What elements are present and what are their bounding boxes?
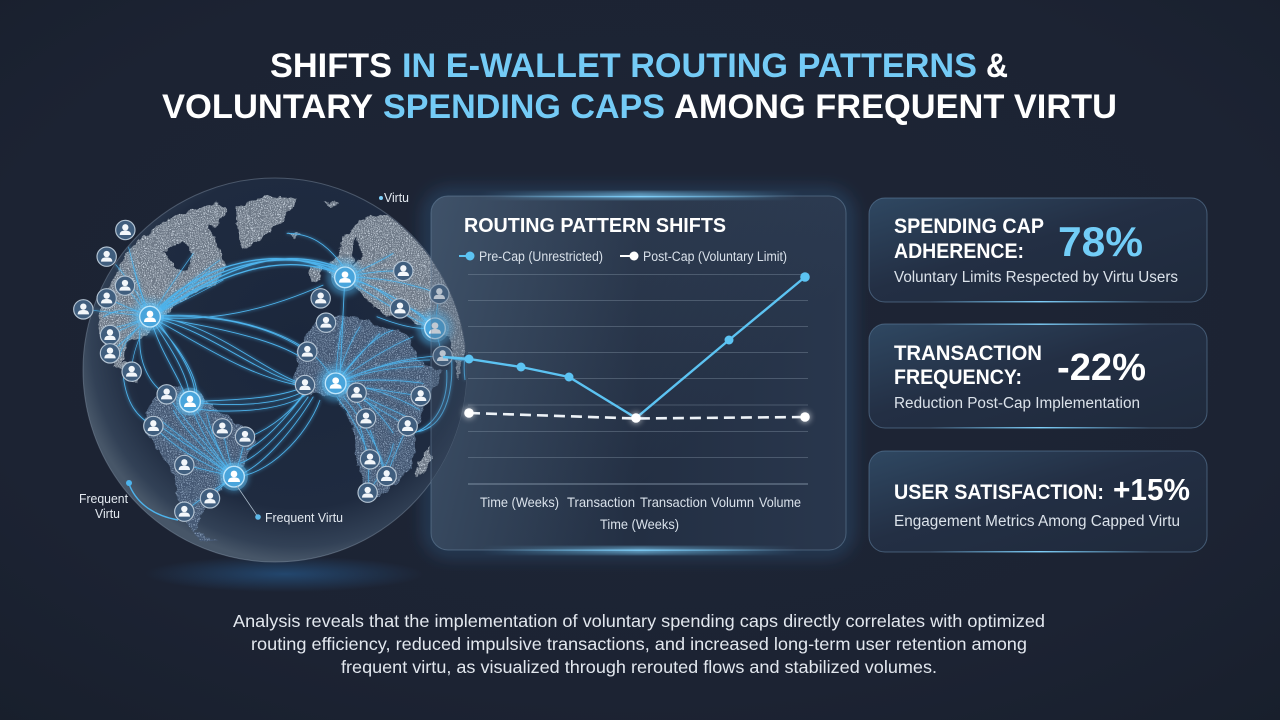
card: transaction frequency: FREQUENCY: — [894, 366, 1022, 389]
label: frequent virtu bottom — [237, 486, 343, 525]
card: spending cap adherence: 78% — [1058, 218, 1143, 265]
title: SPENDING CAPS — [383, 88, 665, 126]
globe labels — [79, 191, 409, 525]
axis labels: Time (Weeks) — [480, 494, 559, 510]
panel glow edges — [480, 193, 800, 553]
user nodes — [74, 220, 452, 521]
route lines — [83, 233, 480, 512]
card: spending cap adherence: Voluntary Limits Respected by Virtu Users — [894, 269, 1178, 286]
label: top virtu: Virtu — [384, 191, 409, 205]
line: pre-cap — [443, 272, 810, 418]
title — [162, 47, 1117, 126]
globe floor glow — [145, 556, 425, 592]
panel halo — [431, 196, 846, 550]
title: VOLUNTARY — [162, 88, 373, 126]
card: transaction frequency — [869, 324, 1207, 428]
card: transaction frequency: TRANSACTION — [894, 342, 1042, 365]
card: spending cap adherence — [869, 198, 1207, 302]
summary paragraph: routing efficiency, reduced impulsive transactions, and increased long-term user retention among — [251, 634, 1027, 654]
label: frequent virtu bottom: Frequent Virtu — [265, 511, 343, 525]
label: frequent virtu left: Virtu — [95, 507, 120, 521]
card: transaction frequency: Reduction Post-Cap Implementation — [894, 395, 1140, 412]
legend: Pre-Cap (Unrestricted) — [479, 249, 603, 264]
line: post-cap — [463, 407, 811, 424]
summary paragraph: frequent virtu, as visualized through rerouted flows and stabilized volumes. — [341, 657, 937, 677]
axis labels — [480, 494, 801, 532]
title: & — [986, 47, 1008, 85]
legend: Post-Cap (Voluntary Limit) — [643, 249, 787, 264]
card: user satisfaction: USER SATISFACTION: — [894, 481, 1104, 504]
axis labels: Time (Weeks) — [600, 516, 679, 532]
summary paragraph: Analysis reveals that the implementation of voluntary spending caps directly correlates with optimized — [233, 611, 1045, 631]
card: spending cap adherence: SPENDING CAP — [894, 215, 1044, 238]
legend — [459, 249, 787, 264]
axis labels: Volumn — [711, 494, 754, 510]
card: user satisfaction — [869, 451, 1207, 552]
card: transaction frequency: -22% — [1057, 347, 1146, 389]
panel: routing pattern shifts chart — [431, 193, 846, 553]
summary paragraph — [233, 611, 1045, 677]
title: SHIFTS — [270, 47, 392, 85]
card: spending cap adherence: ADHERENCE: — [894, 240, 1024, 263]
grid lines — [468, 274, 808, 484]
axis labels: Transaction — [640, 494, 707, 510]
hub glows — [132, 259, 453, 492]
title: AMONG FREQUENT VIRTU — [674, 88, 1117, 126]
axis labels: Volume — [759, 494, 801, 510]
globe with network map — [74, 178, 480, 562]
label: frequent virtu left: Frequent — [79, 492, 129, 506]
axis labels: Transaction — [567, 494, 635, 510]
card: user satisfaction: +15% — [1113, 472, 1190, 507]
land masses — [98, 196, 466, 541]
label: frequent virtu left — [79, 480, 178, 521]
card: user satisfaction: Engagement Metrics Among Capped Virtu — [894, 513, 1180, 530]
chart heading: ROUTING PATTERN SHIFTS — [464, 215, 726, 237]
title: IN E-WALLET ROUTING PATTERNS — [402, 47, 977, 85]
